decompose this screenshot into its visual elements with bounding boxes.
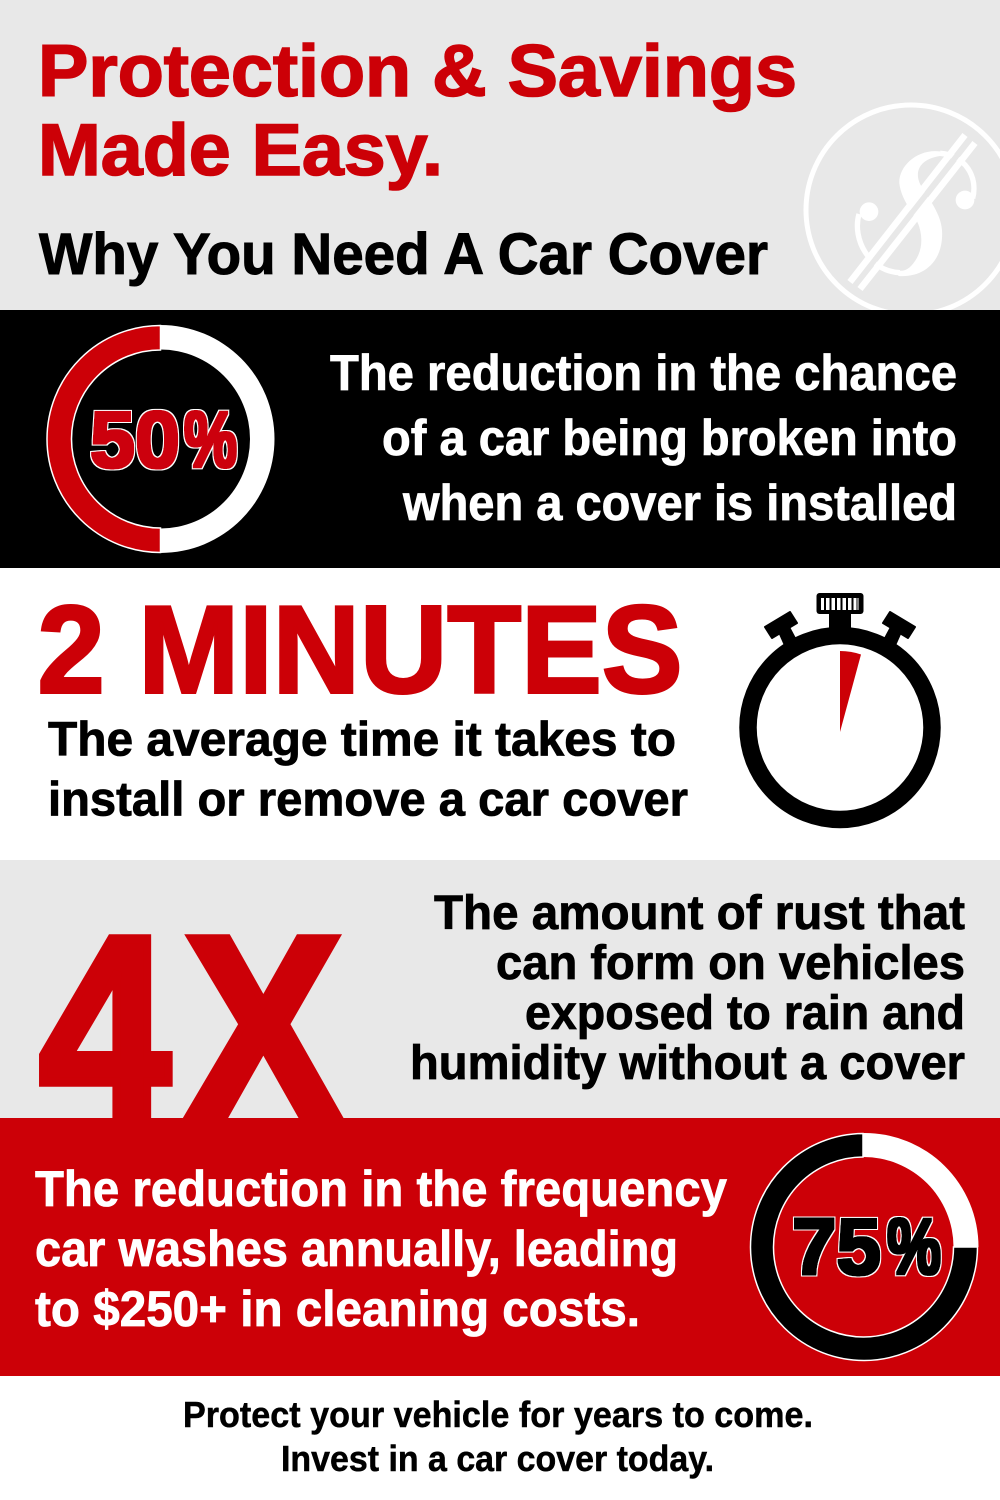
text: 2 minutes description [48,714,688,826]
panel: 75% car wash stat [0,1118,1000,1376]
title [38,31,797,191]
icon: dollar sign in circle [806,105,1000,315]
chart: 50% ring: 50 [90,395,180,484]
text: call to action: Protect your vehicle for years to come. [183,1394,813,1435]
text: 50% description [330,345,957,531]
text: 4X description: exposed to rain and [525,987,965,1040]
title: Protection & Savings [38,31,797,112]
chart: 75% ring: 75 [792,1202,881,1291]
panel: 50% break-in stat [0,310,1000,568]
heading: 2 minutes: 2 MINUTES [38,582,682,720]
chart: 50% ring: % [184,395,237,484]
text: call to action: Invest in a car cover today. [281,1438,714,1479]
text: 2 minutes description: The average time it takes to [48,714,676,766]
panel: footer call to action [0,1376,1000,1500]
text: 75% description [35,1161,727,1337]
text: 75% description: to $250+ in cleaning costs. [35,1281,640,1337]
title: Made Easy. [38,110,443,191]
text: 75% description: The reduction in the frequency [35,1161,727,1217]
text: call to action [183,1394,813,1479]
text: 50% description: of a car being broken into [382,410,957,466]
panel: 4X rust stat [0,860,1000,1118]
chart: 50% ring [47,325,274,553]
text: 4X description: can form on vehicles [496,937,965,990]
chart: 75% ring: % [887,1202,941,1291]
subtitle: Why You Need A Car Cover [39,222,768,287]
text: 4X description [410,887,965,1090]
icon: stopwatch [748,593,932,820]
heading: 4X: 4X [40,882,341,1175]
panel: header [0,0,1000,315]
text: 4X description: The amount of rust that [434,887,965,940]
panel: 2 minutes stat [0,568,1000,860]
text: 4X description: humidity without a cover [410,1037,965,1090]
text: 2 minutes description: install or remove a car cover [48,774,688,826]
text: 50% description: when a cover is installed [402,475,957,531]
text: 75% description: car washes annually, leading [35,1221,678,1277]
text: 50% description: The reduction in the chance [330,345,957,401]
chart: 75% ring [750,1133,978,1360]
